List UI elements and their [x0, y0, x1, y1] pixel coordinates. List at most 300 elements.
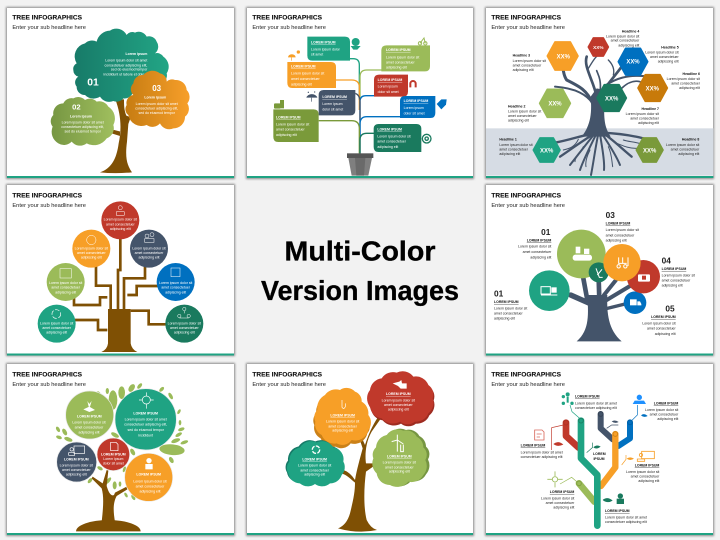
label: headline 5: amet consectetuer	[650, 55, 679, 59]
cloud 02: Lorem ipsum	[70, 114, 92, 118]
subheading: Enter your sub headline here	[12, 25, 86, 31]
label: headline 3: Lorem ipsum dolor sit	[513, 59, 546, 63]
hexagon: orange: XX%	[557, 55, 571, 61]
box: olive: amet consectetuer	[276, 128, 306, 132]
icon: blue tag	[437, 99, 447, 109]
cloud: orange: amet consectetuer	[328, 424, 358, 428]
panel: circuit branch tree	[6, 184, 235, 356]
circle: teal: Lorem ipsum dolor sit	[40, 321, 73, 325]
trunk and ground	[76, 470, 141, 531]
hexagon: blue: XX%	[626, 60, 640, 66]
box: olive	[273, 109, 319, 142]
panel: leafy circle tree	[6, 363, 235, 536]
cloud 02: sed do eiusmod tempor	[64, 130, 102, 134]
icon: umbrella	[306, 91, 317, 102]
label: left: LOREM IPSUM	[521, 444, 545, 448]
panel: four cloud tree	[246, 363, 474, 536]
circle: green: amet consectetuer	[75, 425, 104, 429]
label: headline 8: Lorem ipsum dolor sit	[666, 143, 699, 147]
hexagon: olive	[636, 138, 663, 162]
box: dark green: LOREM IPSUM	[377, 128, 402, 132]
label: headline 6: adipiscing elit	[679, 86, 700, 90]
label: center	[593, 452, 606, 461]
circle: teal: Lorem ipsum dolor sit amet	[125, 418, 167, 422]
label: headline 2: amet consectetuer	[508, 114, 538, 118]
heading: TREE INFOGRAPHICS	[252, 15, 322, 22]
label: 03: 03	[606, 210, 615, 220]
circle: navy: amet consectetuer	[135, 251, 164, 255]
circle: navy	[57, 442, 97, 482]
hexagon: green: XX%	[548, 102, 562, 108]
circle: red	[627, 260, 660, 293]
heading: TREE INFOGRAPHICS	[12, 15, 82, 22]
label: left: consectetuer adipiscing elit	[521, 455, 563, 459]
tree	[571, 278, 630, 341]
slide frame	[6, 184, 235, 356]
subheading: Enter your sub headline here	[491, 203, 565, 209]
circle: orange	[125, 453, 173, 501]
label: headline 4: adipiscing elit	[618, 43, 639, 47]
cloud: teal: Lorem ipsum dolor sit	[298, 464, 331, 468]
heading: TREE INFOGRAPHICS	[491, 192, 561, 199]
hexagon: orange	[547, 42, 578, 70]
label: 01 upper: Lorem ipsum dolor sit	[518, 245, 551, 249]
label: headline 3	[513, 54, 546, 72]
circle: dark green	[165, 305, 203, 343]
label: headline 4	[606, 29, 640, 47]
subheading: Enter your sub headline here	[12, 203, 86, 209]
label: headline 2: Lorem ipsum dolor sit	[508, 110, 541, 114]
box: blue: dolor sit amet	[404, 112, 425, 116]
circle: teal: adipiscing elit	[46, 331, 67, 335]
label: center: LOREM	[593, 452, 606, 456]
cloud: teal: adipiscing elit	[304, 473, 325, 477]
label: 01 upper: adipiscing elit	[530, 255, 551, 259]
cloud: teal: amet consectetuer	[300, 468, 330, 472]
circle: teal	[529, 270, 570, 311]
label: 05: LOREM IPSUM	[651, 315, 676, 319]
label: top center: Lorem ipsum dolor sit amet	[575, 401, 617, 405]
circle: red: dolor sit amet	[103, 462, 124, 466]
label: headline 3: amet consectetuer	[513, 63, 542, 67]
cloud: red	[367, 371, 434, 426]
label: 04: amet consectetuer	[662, 278, 691, 282]
heading: TREE INFOGRAPHICS	[491, 15, 561, 22]
box: navy: dolor sit amet	[322, 107, 343, 111]
icon: green gear	[547, 471, 563, 487]
label: headline 3: adipiscing elit	[513, 68, 534, 72]
box: orange: adipiscing elit	[291, 82, 312, 86]
circle: green	[66, 391, 114, 439]
label: headline 5: adipiscing elit	[658, 60, 679, 64]
branches	[74, 237, 167, 330]
label: right middle: Lorem ipsum dolor sit	[626, 470, 659, 474]
circle: navy: Lorem ipsum dolor sit	[132, 246, 166, 250]
label: bottom	[605, 509, 647, 524]
slide frame	[485, 363, 714, 536]
circle: orange: Lorem ipsum dolor sit	[75, 246, 108, 250]
circle: orange: LOREM IPSUM	[136, 473, 161, 477]
label: headline 3: Headline 3	[513, 54, 530, 58]
cloud: red: adipiscing elit	[388, 407, 409, 411]
circle: green	[47, 263, 85, 301]
label: right middle: amet consectetuer	[631, 474, 660, 478]
cloud: green: adipiscing elit	[389, 470, 410, 474]
circle: green: LOREM IPSUM	[77, 414, 102, 418]
panel: potted plant tree	[246, 7, 474, 179]
cloud: green: amet consectetuer	[385, 465, 415, 469]
tube stems	[566, 414, 630, 526]
slide frame	[485, 184, 714, 356]
label: headline 6	[667, 72, 701, 90]
cloud 02	[51, 97, 115, 146]
cloud 03	[125, 71, 190, 129]
cloud: green: Lorem ipsum dolor sit	[383, 461, 416, 465]
label: headline 8: Headline 8	[682, 138, 699, 142]
label: headline 2	[508, 104, 541, 123]
trunk	[338, 417, 382, 532]
icon: olive basket	[274, 100, 284, 109]
cloud 01: Lorem ipsum dolor sit amet	[105, 59, 147, 63]
tree trunk	[100, 99, 132, 173]
label: headline 1: Lorem ipsum dolor sit	[499, 143, 533, 147]
icon: dark green figures	[422, 134, 431, 143]
circle: navy	[130, 230, 168, 268]
cloud: red: Lorem ipsum dolor sit	[382, 398, 415, 402]
label: headline 4: Lorem ipsum dolor sit	[606, 34, 639, 38]
circle: orange: Lorem ipsum dolor sit	[133, 479, 167, 483]
label: 03: amet consectetuer	[606, 233, 635, 237]
hexagon: red	[588, 38, 608, 56]
label: headline 1	[499, 138, 533, 156]
label: 03: Lorem ipsum dolor sit	[606, 228, 639, 232]
circle: blue: Lorem ipsum dolor sit	[159, 281, 192, 285]
box: teal: LOREM IPSUM	[311, 40, 336, 44]
connector lines	[552, 405, 637, 484]
circle: orange	[603, 244, 641, 281]
box: teal	[307, 37, 350, 61]
box: orange	[287, 62, 336, 88]
circle: dark green	[589, 262, 609, 282]
hexagon: blue	[618, 48, 648, 75]
circle: navy: amet consectetuer	[62, 468, 92, 472]
label: headline 6: amet consectetuer	[671, 81, 701, 85]
label: 05: amet consectetuer	[647, 327, 676, 331]
label: headline 7: adipiscing elit	[638, 121, 659, 125]
hexagon: teal	[533, 138, 560, 162]
label: headline 2: adipiscing elit	[508, 119, 529, 123]
circle: red	[97, 438, 130, 471]
cloud 03: sed do eiusmod tempor	[138, 111, 176, 115]
circle: green: amet consectetuer	[51, 286, 81, 290]
label: 05: Lorem ipsum dolor sit	[642, 321, 676, 325]
box: red: LOREM IPSUM	[378, 78, 402, 82]
cloud 03: Lorem ipsum dolor sit amet	[136, 102, 178, 106]
leaves	[55, 382, 189, 501]
subheading: Enter your sub headline here	[12, 382, 86, 388]
cloud: teal	[286, 440, 345, 486]
icon: orange chart	[637, 451, 654, 461]
label: top right	[645, 401, 679, 421]
label: right middle: adipiscing elit	[638, 479, 659, 483]
cloud: green	[372, 429, 429, 487]
icon: teal hands	[351, 38, 361, 50]
box: olive: adipiscing elit	[276, 133, 297, 137]
label: headline 8: amet consectetuer	[671, 147, 700, 151]
label: lower left: LOREM IPSUM	[550, 490, 574, 494]
center caption: Multi-Color	[284, 236, 436, 266]
cloud: orange: adipiscing elit	[332, 429, 353, 433]
label: 01 lower: amet consectetuer	[494, 311, 524, 315]
hexagon: olive: XX%	[643, 148, 657, 154]
circle: blue	[157, 263, 195, 301]
circle: dark green: Lorem ipsum dolor sit	[168, 321, 201, 325]
cloud 03: consectetuer adipiscing elit,	[135, 106, 178, 110]
label: 01 lower: adipiscing elit	[494, 317, 515, 321]
label: bottom: LOREM IPSUM	[605, 509, 630, 513]
cloud 02: consectetuer adipiscing elit,	[61, 125, 104, 129]
box: blue: Lorem ipsum	[404, 106, 424, 110]
label: top right: adipiscing elit	[657, 417, 678, 421]
circle: blue	[624, 291, 646, 314]
box: navy: LOREM IPSUM	[322, 95, 347, 99]
box: dark green: adipiscing elit	[377, 145, 398, 149]
circle: green: Lorem ipsum dolor sit	[72, 420, 106, 424]
cloud: orange: Lorem ipsum dolor sit	[326, 420, 359, 424]
circle: blue: amet consectetuer	[161, 286, 191, 290]
hexagon: teal: XX%	[540, 148, 554, 154]
circle: red: Lorem ipsum dolor sit	[104, 218, 137, 222]
box: dark green	[374, 124, 421, 152]
circle: orange: adipiscing elit	[81, 256, 102, 260]
small leaves	[553, 414, 648, 502]
circle: teal: amet consectetuer	[42, 326, 72, 330]
cloud: red: LOREM IPSUM	[386, 392, 411, 396]
label: headline 2: Headline 2	[508, 104, 525, 108]
circle: teal: consectetuer adipiscing elit,	[124, 423, 167, 427]
branch end rings	[564, 412, 632, 486]
label: top right: Lorem ipsum dolor sit	[645, 408, 678, 412]
label: top center	[575, 395, 617, 410]
label: 01 upper: 01	[541, 227, 551, 237]
circle: teal	[38, 305, 76, 343]
label: bottom: consectetuer adipiscing elit	[605, 520, 647, 524]
bare tree with roots	[555, 55, 643, 175]
label: 03: LOREM IPSUM	[606, 222, 630, 226]
slide frame	[6, 7, 235, 179]
box: orange: Lorem ipsum dolor sit	[291, 72, 324, 76]
stem branches	[319, 59, 401, 153]
label: 01 lower: LOREM IPSUM	[494, 300, 519, 304]
circle: navy: adipiscing elit	[139, 256, 159, 260]
cloud 03: Lorem ipsum	[144, 96, 166, 100]
label: lower left: adipiscing elit	[553, 506, 574, 510]
label: right middle	[626, 463, 660, 483]
ground band	[486, 128, 713, 176]
label: top center: consectetuer adipiscing elit	[575, 406, 617, 410]
box: dark green: Lorem ipsum dolor sit	[377, 135, 411, 139]
slide frame	[246, 7, 474, 179]
circle: red	[101, 201, 139, 239]
label: top right: amet consectetuer	[650, 412, 679, 416]
icon: red checklist	[535, 430, 544, 440]
hexagon: green	[540, 89, 570, 117]
hexagon: amber	[638, 75, 667, 101]
box: green	[381, 45, 430, 71]
slide frame	[485, 7, 714, 179]
label: 04: adipiscing elit	[662, 284, 683, 288]
box: orange: LOREM IPSUM	[291, 65, 316, 69]
slide frame	[246, 363, 474, 536]
box: red: Lorem ipsum	[378, 85, 398, 89]
panel: cloud tree	[6, 7, 235, 179]
label: headline 7: Lorem ipsum dolor sit	[626, 112, 659, 116]
box: olive: LOREM IPSUM	[276, 115, 301, 119]
heading: TREE INFOGRAPHICS	[12, 192, 82, 199]
label: headline 5	[645, 46, 679, 64]
cloud: red: amet consectetuer	[384, 403, 414, 407]
label: headline 8	[666, 138, 700, 156]
label: headline 7	[626, 107, 660, 125]
cloud 01: consectetuer adipiscing elit,	[105, 63, 147, 67]
box: green: adipiscing elit	[386, 65, 407, 69]
cloud 02: 02	[72, 103, 81, 112]
box: orange: amet consectetuer	[291, 77, 321, 81]
box: green: LOREM IPSUM	[386, 48, 411, 52]
label: 04: LOREM IPSUM	[662, 267, 686, 271]
label: headline 5: Headline 5	[661, 46, 679, 50]
hexagon: dark green	[597, 85, 626, 111]
slide frame	[6, 363, 235, 536]
circle: teal: LOREM IPSUM	[133, 411, 158, 415]
label: headline 1: amet consectetuer	[499, 147, 529, 151]
circle: green	[557, 230, 606, 278]
box: red	[374, 75, 408, 97]
panel: logistics circle tree	[485, 184, 714, 356]
center caption: Version Images	[261, 275, 459, 306]
circle: red: LOREM IPSUM	[101, 452, 126, 456]
circle: teal: sed do eiusmod tempor	[127, 428, 165, 432]
label: lower left: Lorem ipsum dolor sit	[541, 497, 574, 501]
icon: blue presenter	[633, 395, 646, 404]
label: 05	[642, 304, 676, 336]
label: headline 1: adipiscing elit	[499, 152, 520, 156]
label: headline 6: Headline 6	[683, 72, 700, 76]
hexagon: amber: XX%	[646, 86, 660, 92]
cloud 03: 03	[152, 84, 162, 93]
label: center: IPSUM	[593, 457, 605, 461]
cloud: orange: LOREM IPSUM	[330, 413, 355, 417]
label: 05: adipiscing elit	[655, 332, 676, 336]
label: top center: LOREM IPSUM	[575, 395, 600, 399]
icon: red magnet	[409, 80, 417, 87]
label: 01 upper: LOREM IPSUM	[527, 238, 551, 242]
box: navy: Lorem ipsum	[322, 102, 343, 106]
circle: orange: amet consectetuer	[77, 251, 107, 255]
label: bottom: Lorem ipsum dolor sit amet	[605, 515, 647, 519]
cloud 01	[73, 29, 169, 102]
cloud: green: LOREM IPSUM	[387, 454, 412, 458]
heading: TREE INFOGRAPHICS	[12, 371, 82, 378]
box: olive: Lorem ipsum dolor sit	[276, 122, 309, 126]
label: 01 lower	[494, 289, 527, 321]
box: teal: Lorem ipsum dolor	[311, 48, 341, 52]
circle: orange: adipiscing elit	[140, 490, 160, 494]
circle: orange	[72, 230, 110, 268]
pot	[347, 153, 373, 176]
label: 04: 04	[662, 255, 671, 265]
label: headline 6: Lorem ipsum dolor sit	[667, 77, 700, 81]
icon: bicycle	[418, 38, 427, 45]
circle: red: Lorem ipsum	[103, 457, 123, 461]
label: left: Lorem ipsum dolor sit amet	[521, 450, 563, 454]
subheading: Enter your sub headline here	[252, 25, 326, 31]
circle: green: adipiscing elit	[79, 431, 99, 435]
icon: dark green figure	[617, 493, 624, 504]
label: 04: Lorem ipsum dolor sit	[662, 273, 695, 277]
circle: navy: Lorem ipsum dolor sit	[60, 464, 93, 468]
heading: TREE INFOGRAPHICS	[252, 371, 322, 378]
circle: red: amet consectetuer	[106, 222, 136, 226]
circle: navy: LOREM IPSUM	[64, 457, 89, 461]
label: lower left	[541, 490, 575, 510]
label: right middle: LOREM IPSUM	[635, 463, 659, 467]
accent bar	[486, 176, 713, 178]
label: headline 8: adipiscing elit	[678, 152, 699, 156]
icon: orange sun and umbrella	[288, 50, 300, 61]
box: red: dolor sit amet	[378, 90, 399, 94]
circle: dark green: amet consectetuer	[170, 326, 199, 330]
hexagon: red: XX%	[593, 45, 604, 50]
subheading: Enter your sub headline here	[252, 382, 326, 388]
circle: navy: adipiscing elit	[66, 473, 87, 477]
label: 05: 05	[665, 304, 675, 314]
cloud 02: Lorem ipsum dolor sit amet	[62, 121, 104, 125]
label: 04	[662, 255, 695, 288]
cloud 01: 01	[87, 78, 99, 89]
label: 01 lower: Lorem ipsum dolor sit	[494, 306, 527, 310]
hexagon: dark green: XX%	[605, 96, 619, 102]
circle: red: adipiscing elit	[110, 227, 131, 231]
box: navy	[319, 90, 355, 115]
label: headline 5: Lorem ipsum dolor sit	[645, 51, 679, 55]
box: blue	[400, 96, 435, 118]
label: 03	[606, 210, 639, 242]
label: headline 4: Headline 4	[622, 29, 639, 33]
label: top right: LOREM IPSUM	[654, 401, 678, 405]
heading: TREE INFOGRAPHICS	[491, 371, 561, 378]
panel: tube branch tree	[485, 363, 714, 536]
cloud: orange	[313, 388, 371, 448]
circle: teal: incididunt	[138, 433, 153, 437]
label: lower left: amet consectetuer	[546, 501, 575, 505]
cloud 01: incididunt ut labore et dolore	[104, 72, 147, 76]
circle: orange: amet consectetuer	[136, 485, 165, 489]
label: 03: adipiscing elit	[606, 238, 627, 242]
circle: green: Lorem ipsum dolor sit	[49, 281, 82, 285]
label: left	[521, 444, 563, 459]
panel: hexagon root tree	[485, 7, 714, 179]
label: headline 1: Headline 1	[499, 138, 517, 142]
box: green: amet consectetuer	[386, 60, 416, 64]
box: green: Lorem ipsum dolor sit	[386, 55, 419, 59]
label: 01 lower: 01	[494, 289, 504, 299]
label: 01 upper	[518, 227, 552, 259]
box: dark green: amet consectetuer	[377, 140, 407, 144]
trunk	[101, 309, 137, 352]
circle: blue: adipiscing elit	[165, 290, 186, 294]
circle: dark green: adipiscing elit	[174, 331, 195, 335]
